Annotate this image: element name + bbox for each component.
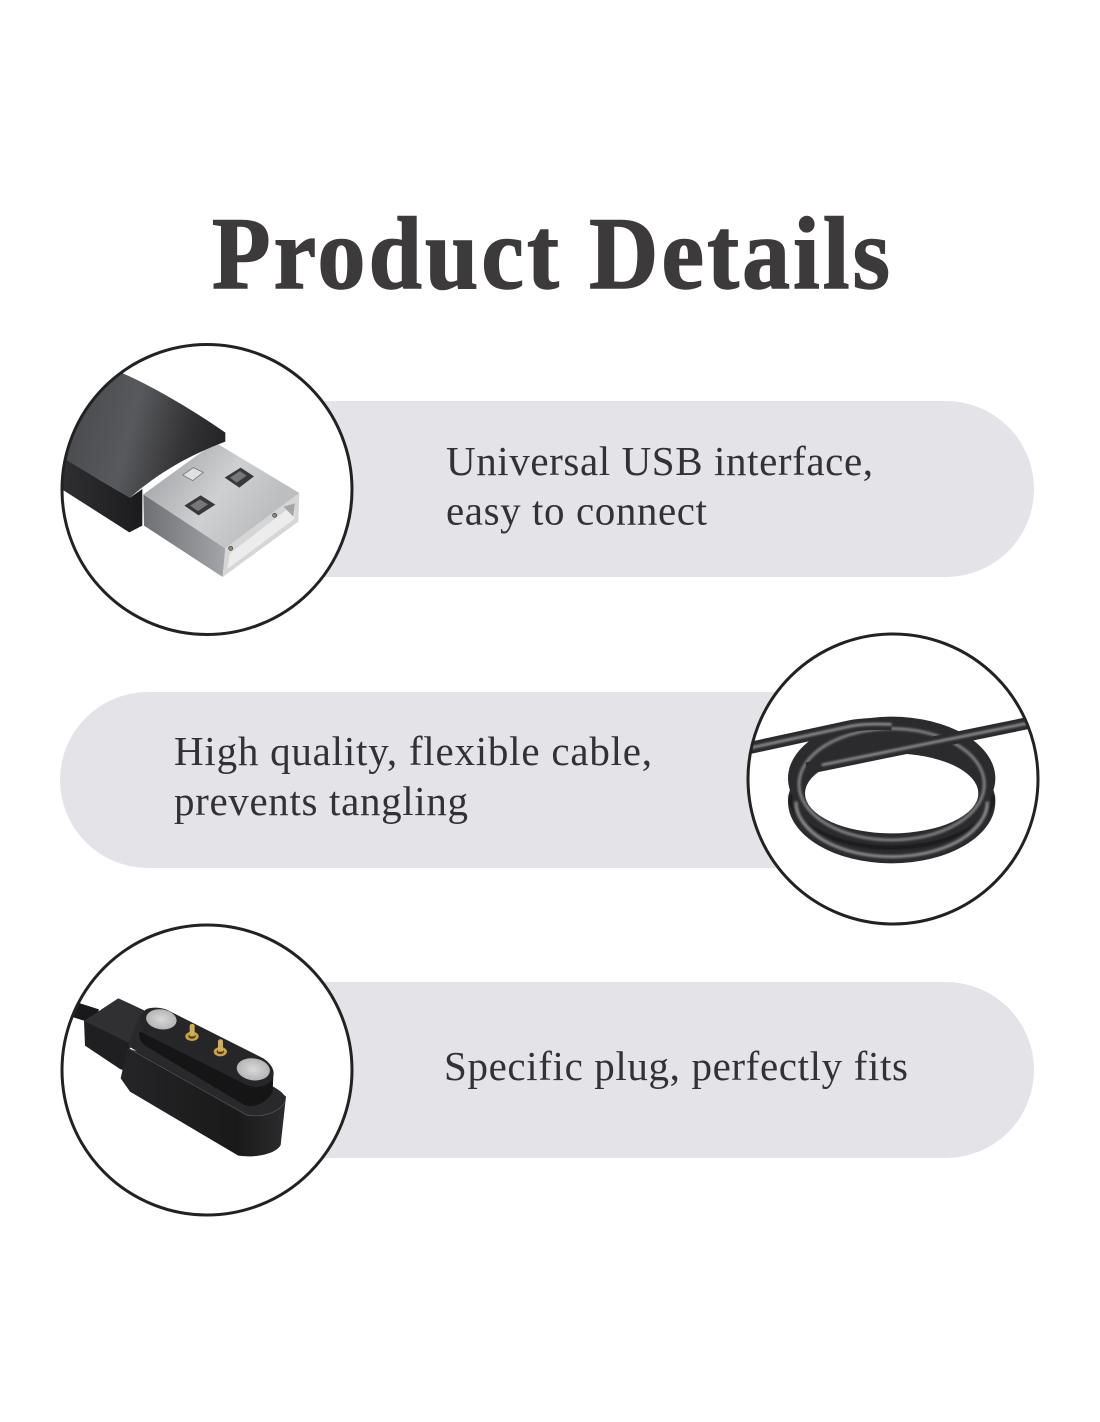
neck: [84, 998, 147, 1072]
pill background: cable: [60, 692, 800, 868]
panel: USB interface: [50, 344, 1034, 634]
USB connector top: [143, 442, 299, 548]
title: Product Details: [212, 196, 890, 311]
plug base top: [127, 1015, 285, 1116]
icon: coiled cable in circle: [745, 634, 1038, 924]
coil hole: [805, 753, 978, 833]
coil silhouette: [788, 716, 996, 790]
USB connector side: [143, 494, 225, 577]
black sleeve side: [64, 460, 142, 532]
right cable end: [807, 722, 1035, 768]
text: USB interface: Universal USB interface,: [446, 438, 873, 484]
icon: magnetic plug in circle: [62, 925, 352, 1215]
raised pin deck side: [139, 1032, 273, 1106]
icon: USB connector in circle: [50, 344, 352, 634]
rim highlight: [129, 1048, 285, 1116]
pill background: USB: [290, 401, 1034, 577]
text: specific plug: Specific plug, perfectly fits: [444, 1043, 908, 1089]
pill background: plug: [290, 982, 1034, 1158]
text: USB interface: easy to connect: [446, 488, 708, 534]
text: flexible cable: [174, 728, 652, 824]
panel: flexible cable: [60, 634, 1038, 924]
magnet contacts: [146, 1009, 177, 1030]
coil highlights and groove: [790, 729, 993, 857]
text: flexible cable: High quality, flexible cable,: [174, 728, 652, 774]
plug cable: [68, 1008, 97, 1017]
left cable end: [745, 724, 892, 749]
black sleeve top: [66, 374, 226, 498]
raised pin deck top: [140, 1008, 274, 1087]
text: USB interface: [446, 438, 873, 534]
plug base body: [121, 1048, 286, 1156]
gold pins: [185, 1032, 199, 1041]
text: flexible cable: prevents tangling: [174, 778, 468, 824]
panel: specific plug: [62, 925, 1034, 1215]
